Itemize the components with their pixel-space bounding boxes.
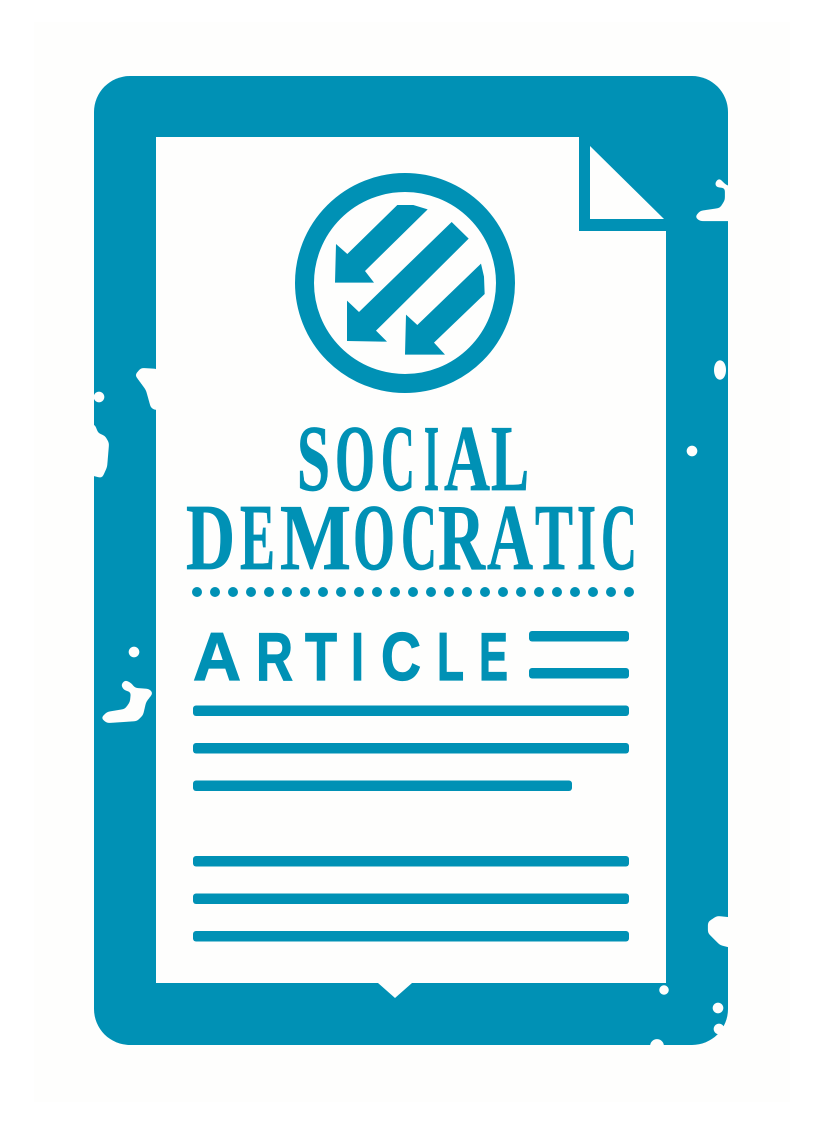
label: Article: R — [256, 619, 293, 695]
heading: Social Democratic: D — [186, 486, 235, 590]
heading: Social Democratic: A — [444, 407, 490, 511]
worn paint splotches on the frame — [86, 178, 736, 1053]
heading: Social Democratic: C — [401, 486, 437, 590]
label: Article: A — [193, 619, 241, 695]
short lines beside the label — [529, 631, 629, 678]
heading: Social Democratic: E — [240, 486, 275, 590]
heading: Social Democratic: C — [601, 486, 637, 590]
label: Article: T — [305, 619, 337, 695]
text placeholder: second paragraph lines — [193, 856, 629, 942]
panel: paper sheet with folded corner and bottom notch — [156, 137, 666, 998]
divider: row of dots — [192, 587, 634, 597]
label: Article: L — [437, 619, 464, 695]
heading: Social Democratic: A — [487, 486, 533, 590]
heading: Social Democratic: I — [424, 407, 439, 511]
label: Article: I — [351, 619, 364, 695]
text placeholder: first paragraph lines — [193, 706, 629, 791]
heading: Social Democratic: M — [280, 486, 351, 590]
label: Article: E — [479, 619, 508, 695]
heading: Social Democratic: T — [535, 486, 573, 590]
panel: blue tablet frame — [94, 76, 728, 1045]
heading: Social Democratic: L — [491, 407, 529, 511]
label: Article: C — [381, 619, 421, 695]
heading: Social Democratic: R — [438, 486, 486, 590]
heading: Social Democratic — [186, 407, 637, 590]
heading: Social Democratic: I — [577, 486, 596, 590]
heading: Social Democratic: C — [381, 407, 415, 511]
icon: three arrows in a circle — [304, 182, 506, 384]
icon: folded corner triangle — [590, 146, 664, 219]
heading: Social Democratic: O — [335, 407, 375, 511]
heading: Social Democratic: O — [353, 486, 395, 590]
heading: Social Democratic: S — [297, 407, 330, 511]
